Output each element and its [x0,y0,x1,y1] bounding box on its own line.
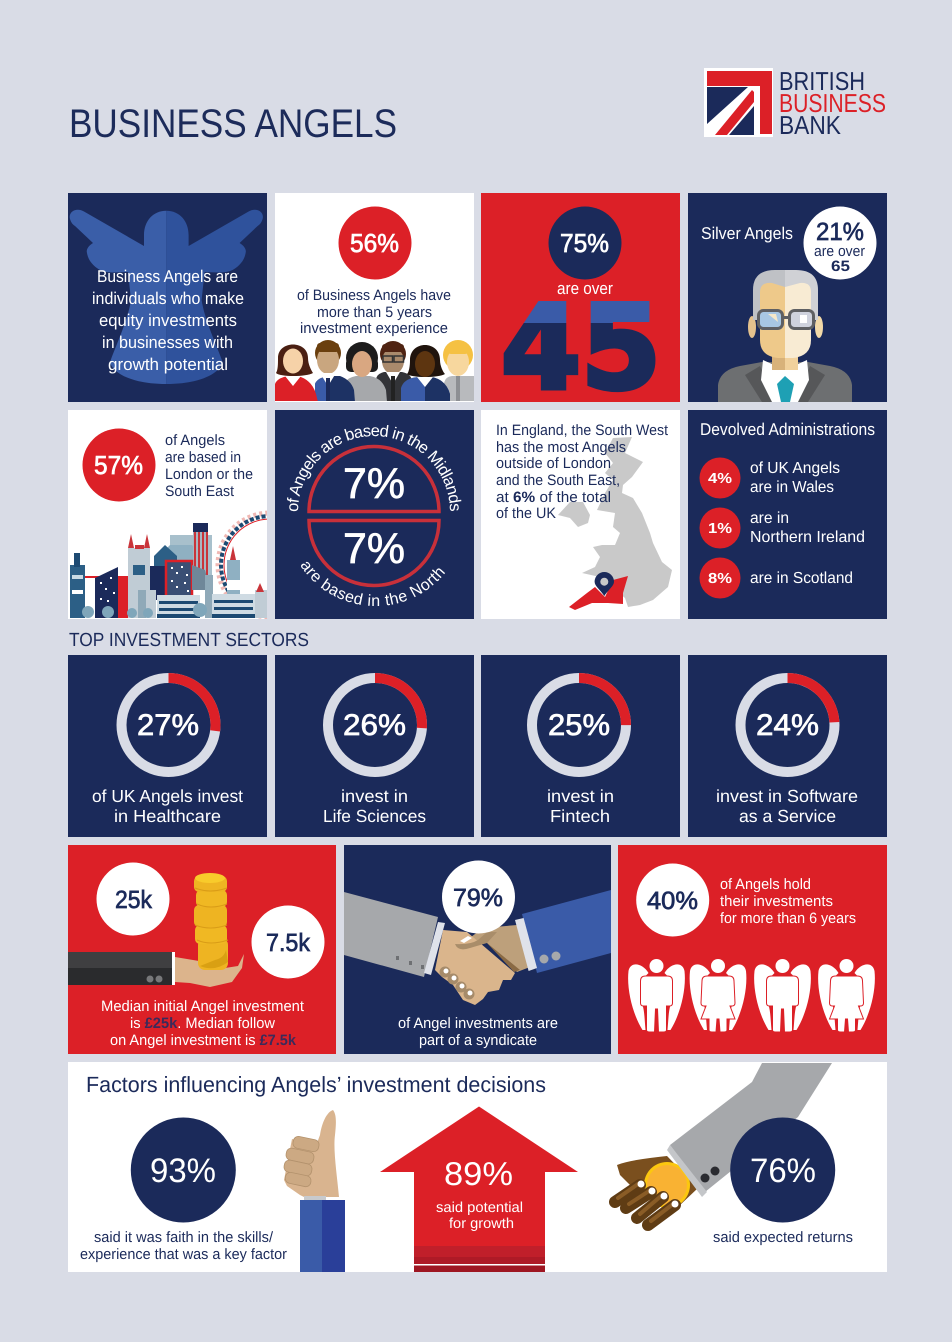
text: South West: at 6% of the total [496,489,611,506]
text: median investment: Median initial Angel investment [101,998,305,1015]
panel: holding period [618,845,887,1054]
panel: devolved administrations [688,410,887,619]
title: BUSINESS ANGELS [69,102,397,146]
panel: factors influencing decisions [68,1062,887,1272]
icon: thumbs up [283,1110,345,1272]
stat: Scotland: 8% [708,571,732,587]
stat: Northern Ireland [700,508,865,548]
logo: British Business Bank: BUSINESS [779,88,886,118]
text: syndicate [398,1015,558,1049]
panel: 75 percent over 45 [481,193,680,416]
text: definition: in businesses with [102,333,233,352]
label [547,786,614,826]
icon: silver-haired man [718,270,852,402]
text: are over: are over [557,279,613,298]
panel: London and the South East [68,410,267,619]
stat circle: 21% are over 65: 21% [816,218,864,246]
text: London share: are based in [165,449,241,466]
stat circle: 40% [636,864,709,936]
stat: Scotland [700,558,853,598]
text: faith: said it was faith in the skills/ [94,1229,274,1246]
map: United Kingdom [558,437,672,610]
donut chart: 27%: 27% [137,709,199,742]
stat: Northern Ireland: 1% [708,521,732,537]
icons: row of four angels [628,959,875,1032]
stat circle: 56%: 56% [350,228,399,258]
heading: Devolved Administrations: Devolved Administrations [700,420,875,439]
label [323,786,426,826]
text: holding period: their investments [720,893,833,910]
text: expected returns: said expected returns [713,1229,853,1246]
text: South West: of the UK [496,505,556,522]
stat: 7% Midlands: 7% [343,460,405,508]
curved text: Midlands: of Angels are based in the Midlands [287,425,462,512]
chart: split circle top half [309,446,439,512]
text: holding period: for more than 6 years [720,910,856,927]
text: faith [80,1229,287,1263]
icon: hand with coin [615,1063,832,1225]
stat circle: 79% [442,860,515,934]
label: invest in [547,786,614,806]
text: London share: of Angels [165,432,225,449]
stat circle: 57%: 57% [94,450,143,480]
stat circle: 21% are over 65 [804,206,876,280]
text: syndicate: part of a syndicate [419,1032,537,1049]
stat circle: 56% [338,206,412,280]
stat circle: 57% [82,428,156,502]
stat circle: 25k [96,862,170,936]
chart: split circle bottom half [309,520,439,586]
panel: Midlands and North [275,410,474,619]
text: South West: has the most Angels [496,439,626,456]
text: median investment: on Angel investment is £7.5k [110,1032,297,1049]
logo: British Business Bank: BANK [779,110,842,140]
stat circle: 25k: 25k [115,886,152,914]
label: of UK Angels invest [92,786,243,806]
text: definition: equity investments [99,311,237,330]
icon: angel silhouette [70,210,263,384]
stat circle: 79%: 79% [453,884,503,912]
donut chart: 24%: 24% [756,709,819,742]
curved text: North: are based in the North [301,562,445,606]
label: invest in [341,786,408,806]
text: median investment [101,998,305,1049]
text: South West: outside of London [496,455,611,472]
stat: Wales: 4% [708,471,732,487]
stat circle: 76% [730,1118,835,1222]
icon: handshake [344,890,611,1005]
stat: Northern Ireland: are in [750,510,789,527]
text: holding period: of Angels hold [720,876,811,893]
text: London share: South East [165,483,235,500]
text: South West: In England, the South West [496,422,669,439]
icon: group of six investors [275,340,475,402]
panel: 56 percent experience [275,193,475,402]
text: experience: more than 5 years [317,304,432,321]
illustration: London skyline [70,510,267,619]
stat circle: 75% [548,206,622,280]
stat: Wales [700,458,840,498]
label [92,786,243,826]
text: London share: London or the [165,466,253,483]
icon: map pin [595,572,614,596]
heading: top investment sectors: TOP INVESTMENT SECTORS [69,630,309,651]
stat circle: 7.5k [252,906,324,978]
text: South West [496,422,669,522]
donut chart: 24% [740,678,834,772]
label: Life Sciences [323,806,426,826]
stat circle: 21% are over 65: 65 [831,258,850,275]
text: syndicate: of Angel investments are [398,1015,558,1032]
text: definition: individuals who make [92,289,244,308]
text: experience [297,287,451,337]
text: median investment: is £25k. Median follow [130,1015,275,1032]
panel: fintech [481,655,680,837]
stat: Scotland: are in Scotland [750,570,853,587]
label: in Healthcare [114,806,221,826]
stat circle: 93%: 93% [150,1152,216,1190]
big number 45: 45 [501,281,661,416]
stat circle: 7.5k: 7.5k [266,929,310,957]
text: definition [92,267,244,374]
arrow: growth: for growth [449,1216,514,1232]
panel: median investment [68,845,336,1054]
stat circle: 76%: 76% [750,1152,816,1190]
stat circle: 21% are over 65: are over [814,243,865,260]
text: Silver Angels: Silver Angels [701,224,793,243]
heading: factors: Factors influencing Angels’ investment decisions [86,1072,546,1097]
donut chart: 27% [122,678,216,772]
label: invest in Software [716,786,858,806]
stat: Wales: are in Wales [750,479,834,496]
stat: 7% North: 7% [343,525,405,573]
panel: silver angels [688,193,887,402]
text: definition: Business Angels are [97,267,238,286]
panel: software as a service [688,655,887,837]
arrow: growth: 89% [444,1155,513,1192]
text: London share [165,432,253,500]
logo: British Business Bank [704,66,886,140]
text: experience: of Business Angels have [297,287,451,304]
arrow: growth: said potential [436,1200,523,1216]
stat circle: 75%: 75% [560,228,609,258]
arrow: growth [380,1106,578,1272]
donut chart: 25%: 25% [548,709,610,742]
text: experience: investment experience [300,320,448,337]
panel: syndicate [344,845,611,1054]
stat circle: 93% [131,1118,236,1222]
text: definition: growth potential [108,355,228,374]
stat: Wales: of UK Angels [750,460,840,477]
text: holding period [720,876,856,927]
text: faith: experience that was a key factor [80,1246,287,1263]
donut chart: 26% [328,678,422,772]
stat circle: 40%: 40% [647,887,698,915]
panel: life sciences [275,655,474,837]
label [716,786,858,826]
label: as a Service [739,806,836,826]
panel: healthcare [68,655,267,837]
donut chart: 26%: 26% [343,709,406,742]
stat: Northern Ireland: Northern Ireland [750,529,865,546]
donut chart: 25% [532,678,626,772]
label: Fintech [550,806,610,826]
text: South West: and the South East, [496,472,620,489]
icon: coin stack in hand [68,873,244,987]
logo: British Business Bank: BRITISH [779,66,865,96]
panel: South West map [481,410,680,619]
panel: what business angels are [68,193,267,402]
